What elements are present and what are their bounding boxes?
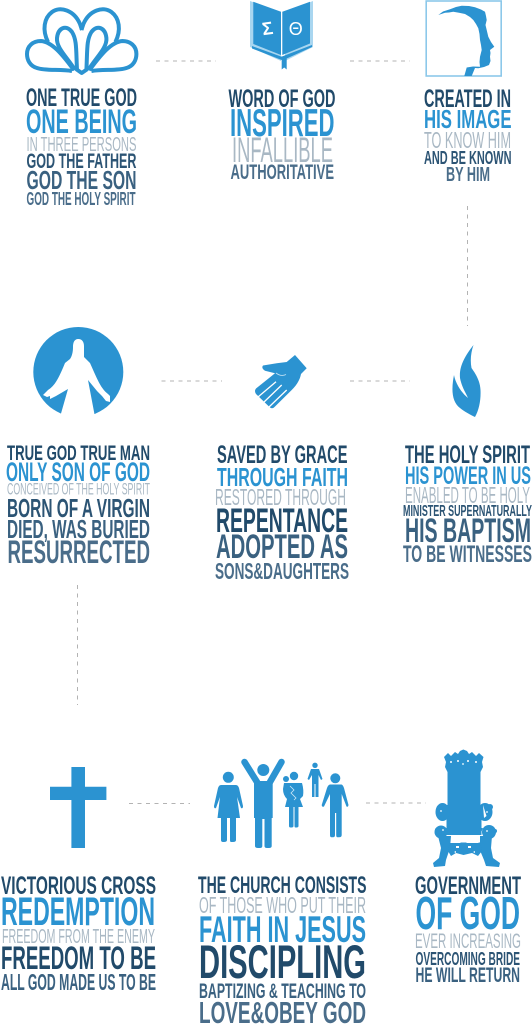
text: saved by grace: ADOPTED AS [216, 528, 348, 566]
panel: created in his image [424, 1, 512, 186]
icon: trinity petals [27, 9, 136, 73]
text: the church: DISCIPLING [199, 936, 366, 989]
text: true god true man [6, 441, 150, 570]
text: the church: BAPTIZING & TEACHING TO [199, 979, 366, 1003]
panel: one true god [26, 9, 137, 209]
text: the church: FAITH IN JESUS [199, 909, 366, 950]
text: created in his image [424, 86, 512, 186]
icon: framed head profiles [426, 1, 501, 76]
text: victorious cross: REDEMPTION [1, 890, 155, 934]
text: one true god: ONE BEING [26, 103, 137, 141]
text: one true god: GOD THE FATHER [26, 149, 137, 173]
panel: saved by grace [215, 355, 349, 584]
text: word of god: WORD OF GOD [228, 86, 336, 113]
text: one true god: IN THREE PERSONS [26, 134, 136, 156]
text: the church [198, 872, 366, 1024]
panel: true god true man [6, 327, 150, 570]
text: true god true man: CONCEIVED OF THE HOLY SPIRIT [7, 480, 150, 498]
panel: government of god [415, 750, 521, 987]
text: government of god [415, 873, 521, 987]
text: victorious cross: ALL GOD MADE US TO BE [1, 969, 156, 995]
icon: throne [433, 750, 500, 867]
icon: christ figure in circle [33, 327, 123, 417]
icon: open book [250, 1, 313, 70]
text: word of god: INFALLIBLE [232, 130, 333, 170]
text: one true god: GOD THE HOLY SPIRIT [26, 188, 136, 209]
text: one true god: ONE TRUE GOD [26, 85, 137, 112]
text: true god true man: TRUE GOD TRUE MAN [7, 441, 150, 465]
text: saved by grace [215, 442, 349, 584]
text: true god true man: BORN OF A VIRGIN [7, 493, 150, 523]
text: the church: OF THOSE WHO PUT THEIR [199, 892, 366, 918]
text: victorious cross: FREEDOM TO BE [1, 940, 156, 976]
panel: the holy spirit [403, 345, 532, 568]
text: true god true man: ONLY SON OF GOD [6, 457, 150, 487]
text: saved by grace: REPENTANCE [216, 502, 348, 540]
text: one true god: GOD THE SON [26, 165, 136, 195]
icon: group of people [214, 762, 348, 848]
icon: open hand [255, 355, 307, 408]
icon: open book: Σ [261, 18, 274, 39]
text: true god true man: DIED, WAS BURIED [7, 514, 150, 544]
text: the holy spirit [403, 442, 532, 568]
text: word of god: AUTHORITATIVE [230, 160, 334, 184]
panel: victorious cross [1, 767, 156, 995]
text: the church: THE CHURCH CONSISTS [198, 872, 366, 899]
text: victorious cross: FREEDOM FROM THE ENEMY [2, 926, 155, 948]
icon: open book: Θ [289, 19, 303, 39]
icon: cross [50, 767, 106, 848]
panel: the church [198, 762, 366, 1024]
text: saved by grace: THROUGH FAITH [217, 462, 348, 492]
text: victorious cross: VICTORIOUS CROSS [1, 873, 156, 900]
text: saved by grace: RESTORED THROUGH [215, 484, 346, 510]
text: saved by grace: SAVED BY GRACE [217, 442, 348, 469]
text: created in his image: BY HIM [446, 164, 490, 186]
text: one true god [26, 85, 137, 209]
text: true god true man: RESURRECTED [8, 534, 150, 570]
text: victorious cross [1, 873, 156, 995]
panel: word of god [228, 1, 336, 184]
text: word of god: INSPIRED [230, 102, 334, 145]
text: saved by grace: SONS&DAUGHTERS [215, 558, 349, 584]
text: word of god [228, 86, 336, 184]
icon: flame [452, 345, 481, 417]
